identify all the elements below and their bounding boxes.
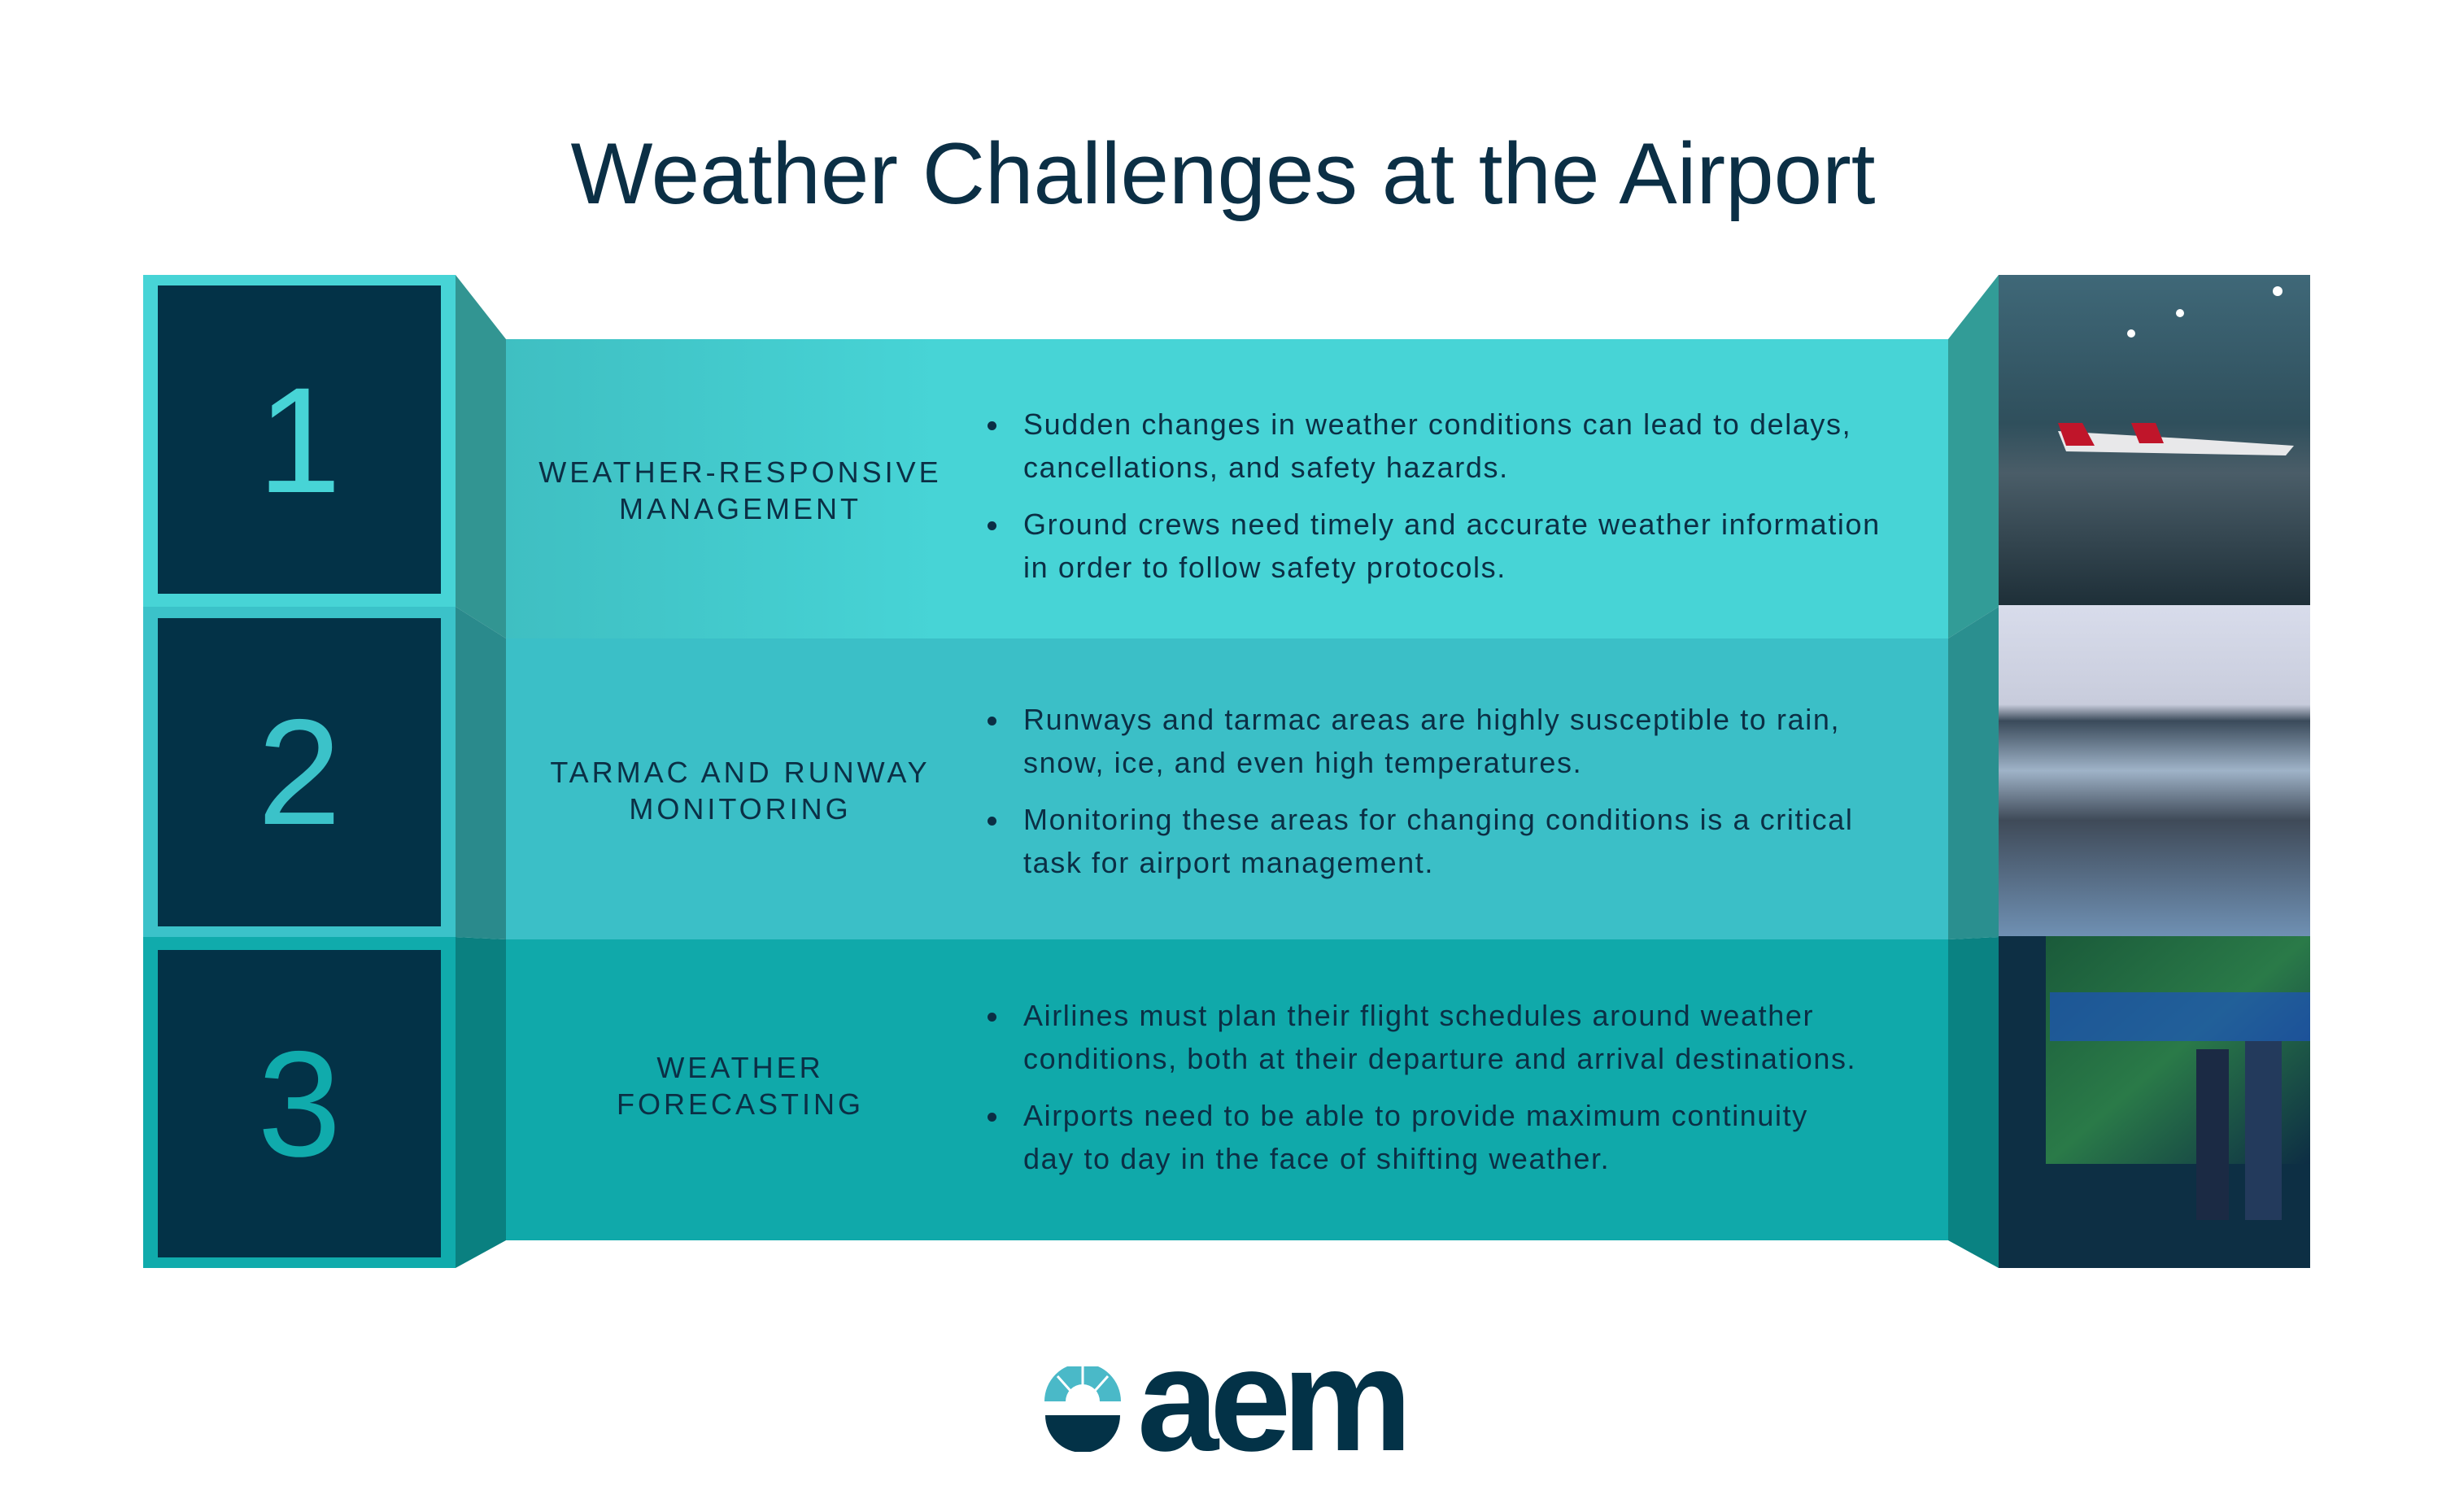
bullets: row 2 [988,703,1853,879]
photo: rainy airport [1999,275,2310,605]
bullets: row 2: Monitoring these areas for changing conditions is a critical task for airport management. [1023,803,1853,879]
photo: forecasting room [1999,936,2310,1268]
bullets: row 3 [988,999,1856,1175]
number 2: 2 [258,689,341,856]
bullets: row 2: Runways and tarmac areas are highly susceptible to rain, snow, ice, and even high temperatures. [1023,703,1840,779]
panel: row 2 [143,607,1999,939]
label: row 3: WEATHER [656,1051,824,1084]
label: row 3: FORECASTING [617,1087,864,1121]
logo [1044,1318,1404,1482]
logo text: aem [1137,1318,1403,1482]
label: row 1 [538,455,942,525]
number 3: 3 [258,1021,341,1188]
icon: logo mark [1044,1366,1121,1452]
bullets: row 1: Ground crews need timely and accurate weather information in order to follow safety protocols. [1023,508,1881,584]
label: row 1: WEATHER-RESPONSIVE [538,455,942,489]
bullets: row 1: Sudden changes in weather conditions can lead to delays, cancellations, and safety hazards. [1023,407,1851,484]
bullets: row 1 [988,407,1881,584]
label: row 1: MANAGEMENT [619,492,861,525]
panel: row 1 [143,275,1999,638]
label: row 2: MONITORING [629,792,852,826]
panel: row 3 [143,937,1999,1268]
photo: snowy runway [1999,605,2310,936]
number 1: 1 [258,357,341,525]
bullets: row 3: day to day in the face of shifting weather. [1023,1142,1610,1175]
bullets: row 3: conditions, both at their departure and arrival destinations. [1023,1042,1856,1075]
label: row 3 [617,1051,864,1121]
title: Weather Challenges at the Airport [571,124,1875,222]
bullets: row 3: Airlines must plan their flight schedules around weather [1023,999,1814,1032]
bullets: row 3: Airports need to be able to provide maximum continuity [1023,1099,1808,1132]
label: row 2: TARMAC AND RUNWAY [550,756,931,789]
label: row 2 [550,756,931,826]
